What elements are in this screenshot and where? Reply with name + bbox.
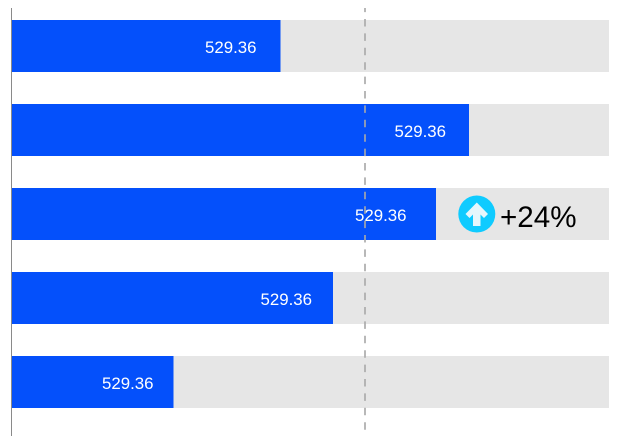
icon: up arrow in circle bbox=[458, 196, 495, 232]
bar 3: 529.36 bbox=[355, 206, 406, 225]
bar 5: 529.36 bbox=[102, 374, 154, 393]
bar 3 bbox=[12, 188, 609, 240]
bar 2 bbox=[12, 104, 609, 156]
bar 5 bbox=[12, 356, 609, 408]
bar 1 bbox=[12, 20, 609, 72]
bar 4 bbox=[12, 272, 609, 324]
dashed reference line bbox=[364, 8, 366, 436]
callout: percent change: +24% bbox=[500, 201, 576, 234]
bar 2: 529.36 bbox=[394, 122, 446, 141]
bar 4: 529.36 bbox=[260, 290, 312, 309]
vertical axis bbox=[10, 8, 12, 436]
bar 1: 529.36 bbox=[205, 38, 256, 57]
